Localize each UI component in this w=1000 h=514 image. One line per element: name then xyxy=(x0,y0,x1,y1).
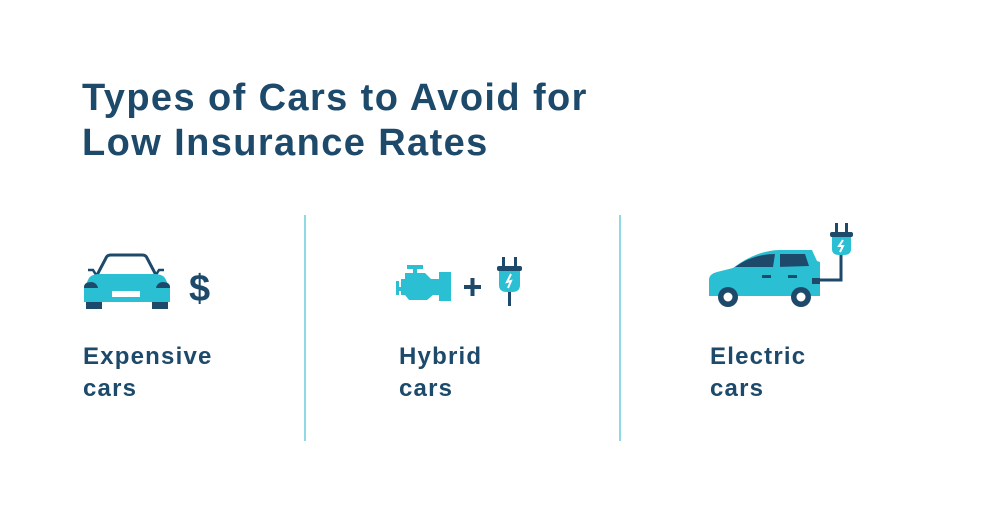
icon: hybrid xyxy=(396,257,522,306)
label: electric xyxy=(710,343,806,402)
label: hybrid xyxy=(399,343,482,402)
title: Types of Cars to Avoid for xyxy=(82,77,588,119)
icon: expensive car xyxy=(84,254,210,310)
label: electric: cars xyxy=(710,375,764,402)
label: hybrid: Hybrid xyxy=(399,343,482,370)
title xyxy=(82,77,588,164)
icon: electric car xyxy=(709,223,853,307)
label: expensive: Expensive xyxy=(83,343,213,370)
label: expensive xyxy=(83,343,213,402)
title: Low Insurance Rates xyxy=(82,122,489,164)
label: electric: Electric xyxy=(710,343,806,370)
label: hybrid: cars xyxy=(399,375,453,402)
icon: expensive car: $ xyxy=(189,268,210,310)
label: expensive: cars xyxy=(83,375,137,402)
